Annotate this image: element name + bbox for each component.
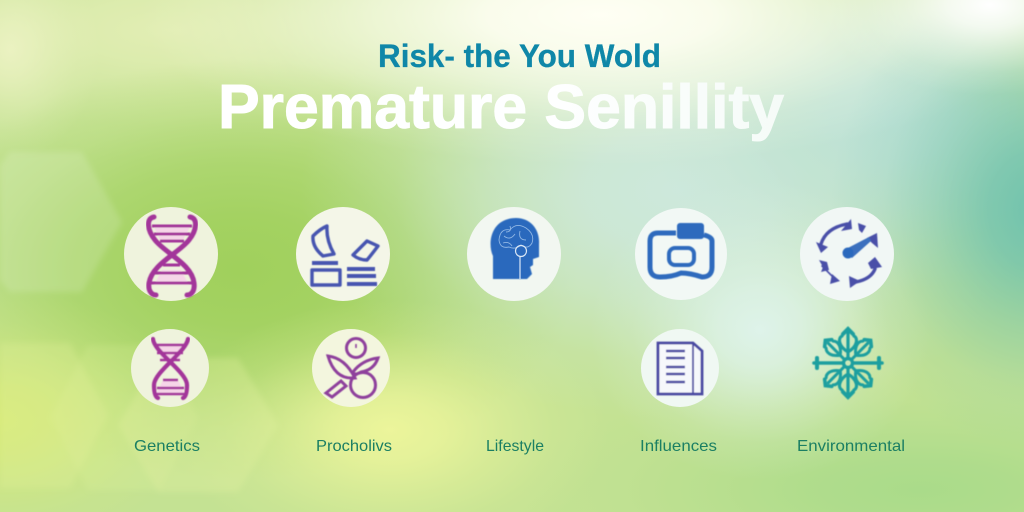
icon: large DNA helix [124, 207, 218, 301]
icon: camera [635, 208, 727, 300]
subtitle: Risk- the You Wold [378, 38, 661, 74]
label: Environmental: Environmental [797, 438, 905, 455]
label: Lifestyle: Lifestyle [486, 438, 544, 455]
icon: leaves and magnifier [312, 329, 390, 407]
decorative hexagons [0, 152, 278, 492]
icon: snowflake [814, 329, 882, 397]
label: Influences: Influences [640, 438, 717, 455]
icon: gauge with arrows [800, 207, 894, 301]
label: Genetics: Genetics [134, 438, 200, 455]
label: Procholivs: Procholivs [316, 438, 392, 455]
icon: documents and bars [296, 207, 390, 301]
icon: small DNA helix [131, 329, 209, 407]
icon: head with brain [467, 207, 561, 301]
main title: Premature Senillity [218, 73, 785, 142]
icon: document [641, 329, 719, 407]
